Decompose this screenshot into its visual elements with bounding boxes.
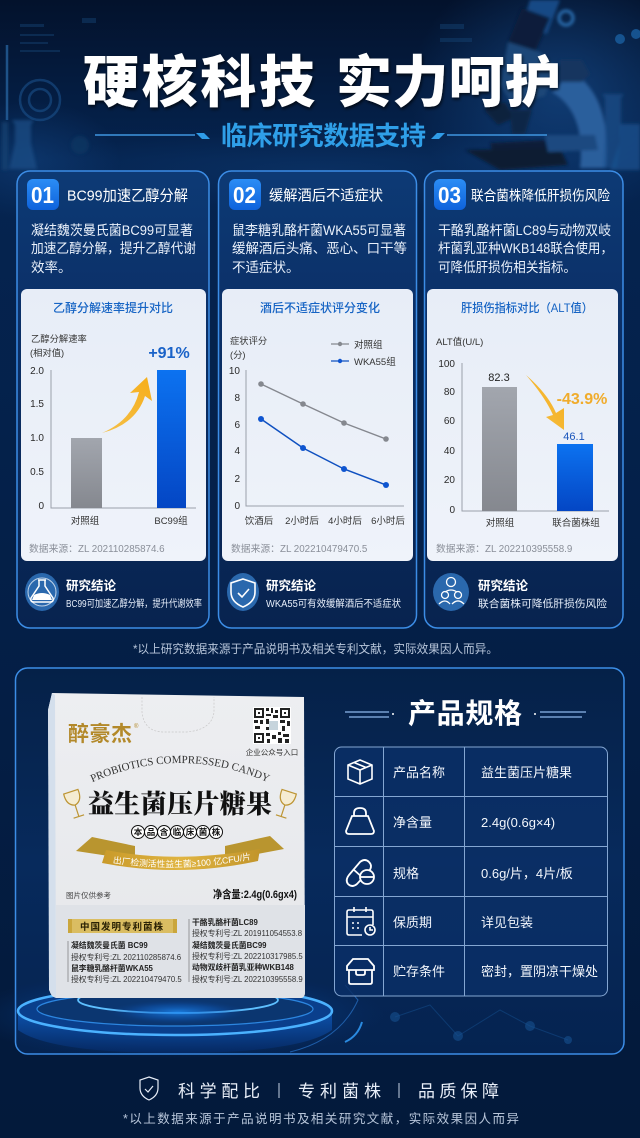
card description: 不适症状。 <box>232 260 300 275</box>
row: storage <box>393 964 598 979</box>
clinical strain circles: 床 <box>186 827 195 837</box>
chart: symptom score lines: 酒后不适症状评分变化 <box>260 300 380 315</box>
legend <box>331 339 396 368</box>
patent list right: 授权专利号:ZL 201911054553.8 <box>192 928 302 938</box>
row: shelf life: 保质期 <box>393 915 432 930</box>
line: WKA55 <box>258 416 389 488</box>
icon: flask <box>25 573 59 611</box>
subtitle <box>95 121 547 151</box>
icon: weight <box>346 808 374 834</box>
icon: calendar <box>347 907 375 935</box>
patent list left: 授权专利号:ZL 202210479470.5 <box>71 974 182 984</box>
chart: ethanol rate bars: +91% <box>148 345 190 362</box>
row: product name: 产品名称 <box>393 765 445 780</box>
chart: ALT bars: 联合菌株组 <box>552 517 600 529</box>
chart: ALT bars: 20 <box>444 475 455 486</box>
chart: ethanol rate bars: 对照组 <box>71 515 100 527</box>
chart: ethanol rate bars: BC99组 <box>154 515 188 527</box>
card description: 杆菌乳亚种WKB148联合使用， <box>438 240 613 256</box>
gold ribbon <box>76 836 284 870</box>
patent list left: 授权专利号:ZL 202110285874.6 <box>71 952 181 962</box>
title: 实力呵护 <box>336 51 561 114</box>
card description: 加速乙醇分解，提升乙醇代谢 <box>31 240 196 256</box>
subtitle: 临床研究数据支持 <box>221 121 426 151</box>
chart: symptom score lines: 6 <box>234 420 240 431</box>
patent list left <box>68 940 182 984</box>
row: specification <box>393 866 573 881</box>
card description: 效率。 <box>31 259 72 275</box>
badge 02: 02 <box>233 182 256 208</box>
row: shelf life: 详见包装 <box>481 915 533 930</box>
icon: storage box <box>347 959 374 984</box>
clinical strain circles: 本 <box>134 827 143 837</box>
chart: ethanol rate bars: 1.0 <box>30 433 44 444</box>
row: storage: 贮存条件 <box>393 964 445 979</box>
icon: wine glasses <box>64 789 296 819</box>
panel: card 2 <box>218 171 416 628</box>
arrow <box>102 377 152 433</box>
badge 02 <box>229 179 261 210</box>
card heading: 联合菌株降低肝损伤风险 <box>471 188 610 204</box>
decoration: glowing platform <box>0 971 572 1059</box>
chart: ethanol rate bars: 乙醇分解速率提升对比 <box>53 300 173 315</box>
badge 03 <box>434 179 466 210</box>
card description <box>31 223 196 275</box>
chart: symptom score lines: 2小时后 <box>285 515 319 527</box>
clinical strain circles: 株 <box>212 827 221 837</box>
chart: ethanol rate bars: 2.0 <box>30 366 44 377</box>
conclusion <box>433 573 608 611</box>
card description: 缓解酒后头痛、恶心、口干等 <box>232 240 407 256</box>
card heading: BC99加速乙醇分解 <box>67 188 188 204</box>
chart: symptom score lines <box>222 289 413 561</box>
clinical strain circles: 临 <box>173 827 182 837</box>
chart: ALT bars <box>427 289 618 561</box>
chart: ethanol rate bars <box>21 289 206 561</box>
row: shelf life <box>393 915 533 930</box>
spec heading: 产品规格 <box>408 698 522 729</box>
chart: ALT bars: 100 <box>438 359 455 370</box>
panel: product <box>0 667 625 1055</box>
conclusion: WKA55可有效缓解酒后不适症状 <box>266 597 401 610</box>
footer tagline: 专利菌株 <box>298 1082 381 1101</box>
chart: ALT bars: 数据来源：ZL 202210395558.9 <box>436 542 572 555</box>
patent list right: 授权专利号:ZL 202210317985.5 <box>192 951 303 961</box>
badge 01: 01 <box>31 182 54 208</box>
chart: ethanol rate bars: 乙醇分解速率 <box>31 333 87 344</box>
card description: 干酪乳酪杆菌LC89与动物双岐 <box>438 223 611 238</box>
patent list right: 凝结魏茨曼氏菌BC99 <box>192 940 267 950</box>
conclusion: BC99可加速乙醇分解，提升代谢效率 <box>66 597 202 610</box>
footer tagline: 品质保障 <box>418 1082 499 1101</box>
chart: symptom score lines: 数据来源：ZL 202210479470.5 <box>231 542 368 555</box>
chart: symptom score lines: 症状评分 <box>230 335 267 346</box>
row: net weight: 净含量 <box>393 815 432 830</box>
product box: 企业公众号入口 <box>246 747 298 757</box>
row: specification: 规格 <box>393 866 419 881</box>
conclusion: 联合菌株可降低肝损伤风险 <box>478 597 608 610</box>
patent list right: 动物双歧杆菌乳亚种WKB148 <box>192 962 294 972</box>
chart: ethanol rate bars: 0.5 <box>30 467 44 478</box>
conclusion <box>227 573 401 611</box>
patent banner: 中国发明专利菌株 <box>80 921 164 933</box>
patent list left: 鼠李糖乳酪杆菌WKA55 <box>71 963 154 973</box>
card description <box>438 223 613 275</box>
icon: shield <box>140 1077 158 1100</box>
clinical strain circles <box>132 826 222 838</box>
arrow <box>526 375 564 430</box>
title: 硬核科技 <box>83 51 315 114</box>
chart: symptom score lines: 6小时后 <box>371 515 405 527</box>
legend: 对照组 <box>354 339 383 351</box>
chart: symptom score lines: 4小时后 <box>328 515 362 527</box>
card description: 鼠李糖乳酪杆菌WKA55可显著 <box>232 223 406 238</box>
chart: ethanol rate bars: 1.5 <box>30 399 44 410</box>
card heading: 缓解酒后不适症状 <box>269 188 383 204</box>
patent list right: 干酪乳酪杆菌LC89 <box>192 917 259 927</box>
conclusion <box>25 573 202 611</box>
row: specification: 0.6g/片，4片/板 <box>481 866 573 881</box>
patent list right: 授权专利号:ZL 202210395558.9 <box>192 974 303 984</box>
decoration: microscope <box>465 0 640 170</box>
spec heading <box>345 698 586 729</box>
product box: 净含量:2.4g(0.6gx4) <box>213 887 297 901</box>
card description <box>232 223 407 275</box>
title <box>83 51 561 114</box>
chart: ALT bars: 0 <box>449 505 455 516</box>
QR code <box>253 707 291 744</box>
chart: symptom score lines: 10 <box>229 366 240 377</box>
card description: 凝结魏茨曼氏菌BC99可显著 <box>31 223 193 238</box>
gold ribbon: 出厂检测活性益生菌≥100 亿CFU/片 <box>114 852 250 868</box>
patent banner <box>68 919 177 933</box>
chart: symptom score lines: (分) <box>230 350 246 360</box>
product box: 图片仅供参考 <box>66 890 111 900</box>
conclusion: 研究结论 <box>266 578 317 593</box>
clinical strain circles: 菌 <box>199 827 208 837</box>
badge 03: 03 <box>438 182 461 208</box>
icon: capsule <box>347 860 374 886</box>
product name: 益生菌压片糖果 <box>88 789 272 819</box>
chart: ethanol rate bars: 数据来源：ZL 202110285874.6 <box>29 542 165 555</box>
conclusion: 研究结论 <box>478 578 529 593</box>
chart: ALT bars: 82.3 <box>488 372 510 384</box>
panel: card 3 <box>424 171 623 628</box>
spec table <box>334 747 608 996</box>
badge 01 <box>27 179 59 210</box>
chart: ethanol rate bars: (相对值) <box>30 347 64 358</box>
chart: ALT bars: 80 <box>444 387 455 398</box>
patent list right <box>189 917 303 984</box>
chart: ALT bars: 40 <box>444 446 455 457</box>
chart: ALT bars: 肝损伤指标对比（ALT值） <box>461 300 593 315</box>
chart: ALT bars: 46.1 <box>563 431 585 443</box>
chart: symptom score lines: 0 <box>234 501 240 512</box>
icon: shield <box>227 573 259 611</box>
chart: symptom score lines: 2 <box>234 474 240 485</box>
chart: ALT bars: -43.9% <box>557 391 607 408</box>
brand: 醉豪杰 <box>68 722 132 746</box>
chart: ALT bars: 对照组 <box>486 517 515 529</box>
patent list left: 凝结魏茨曼氏菌 BC99 <box>71 940 148 950</box>
chart: symptom score lines: 饮酒后 <box>245 515 274 527</box>
arc text: PROBIOTICS COMPRESSED CANDY <box>90 756 270 782</box>
row: net weight: 2.4g(0.6g×4) <box>481 815 555 830</box>
product box <box>48 693 305 998</box>
decoration: left flask <box>2 120 89 170</box>
legend: WKA55组 <box>354 356 396 368</box>
row: net weight <box>393 815 555 830</box>
brand: ® <box>134 723 139 730</box>
clinical strain circles: 品 <box>147 827 155 837</box>
chart: symptom score lines: 4 <box>234 446 240 457</box>
chart: ALT bars: 60 <box>444 416 455 427</box>
card description: 可降低肝损伤相关指标。 <box>438 260 576 275</box>
icon: people <box>433 573 469 611</box>
icon: box <box>348 760 372 784</box>
row: product name <box>393 765 572 780</box>
panel: card 1 <box>17 171 209 628</box>
footnote: *以上研究数据来源于产品说明书及相关专利文献，实际效果因人而异。 <box>133 641 498 656</box>
chart: symptom score lines: 8 <box>234 393 240 404</box>
chart: ALT bars: ALT值(U/L) <box>436 336 483 348</box>
footer note: *以上数据来源于产品说明书及相关研究文献，实际效果因人而异 <box>123 1111 519 1126</box>
footer tagline: 科学配比 <box>178 1082 260 1101</box>
chart: ethanol rate bars: 0 <box>38 501 44 512</box>
clinical strain circles: 含 <box>160 827 169 837</box>
row: product name: 益生菌压片糖果 <box>481 765 572 780</box>
conclusion: 研究结论 <box>66 578 117 593</box>
row: storage: 密封，置阴凉干燥处 <box>481 964 598 979</box>
line: control <box>258 381 389 442</box>
footer tagline <box>140 1077 499 1101</box>
